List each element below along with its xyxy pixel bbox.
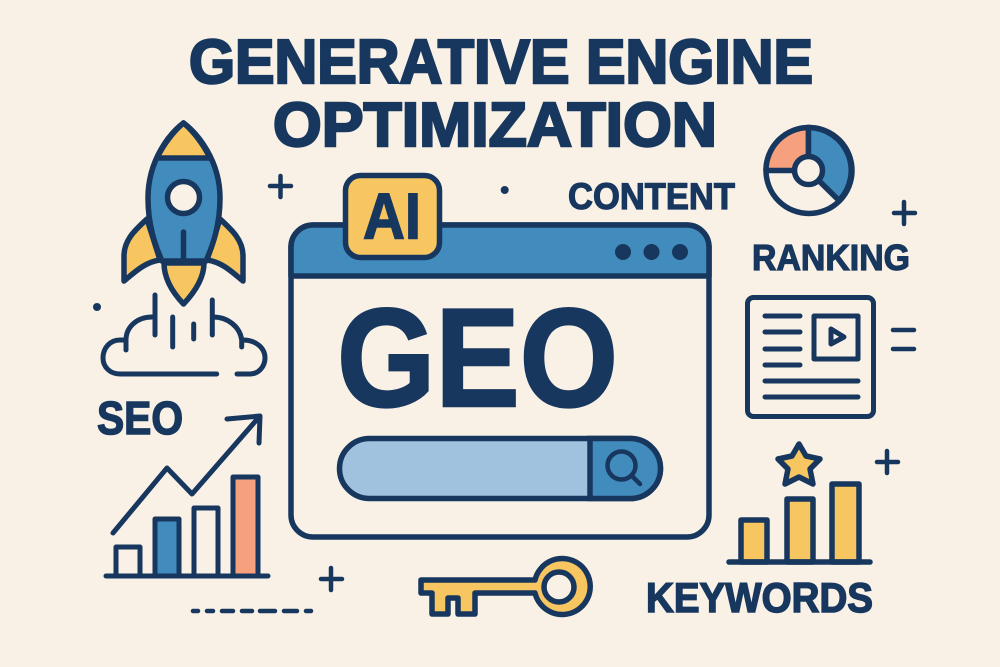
window control dots (615, 244, 688, 260)
AI badge: AI (363, 180, 421, 252)
label: KEYWORDS: KEYWORDS (646, 574, 873, 621)
label: CONTENT: CONTENT (568, 176, 735, 217)
icon: cloud and exhaust (103, 295, 265, 374)
icon: rocket (124, 123, 243, 304)
decorative plus signs (270, 176, 915, 590)
title: OPTIMIZATION (273, 91, 717, 160)
dot (93, 303, 101, 311)
title (189, 28, 813, 160)
title: GENERATIVE ENGINE (189, 28, 813, 97)
bar chart: SEO growth (106, 416, 268, 576)
icon: pie chart (766, 128, 852, 214)
icon: key (421, 559, 590, 615)
label: SEO: SEO (97, 392, 183, 444)
icon: content document with video (748, 298, 874, 416)
bar chart: keywords (729, 444, 870, 562)
icon: star (778, 444, 820, 484)
dashed line (193, 609, 311, 613)
icon: magnifier (608, 452, 640, 484)
label: RANKING: RANKING (752, 237, 910, 278)
browser window (291, 225, 709, 537)
dot (501, 186, 509, 194)
GEO heading: GEO (337, 279, 618, 436)
AI badge (346, 176, 440, 258)
search bar (340, 438, 660, 498)
